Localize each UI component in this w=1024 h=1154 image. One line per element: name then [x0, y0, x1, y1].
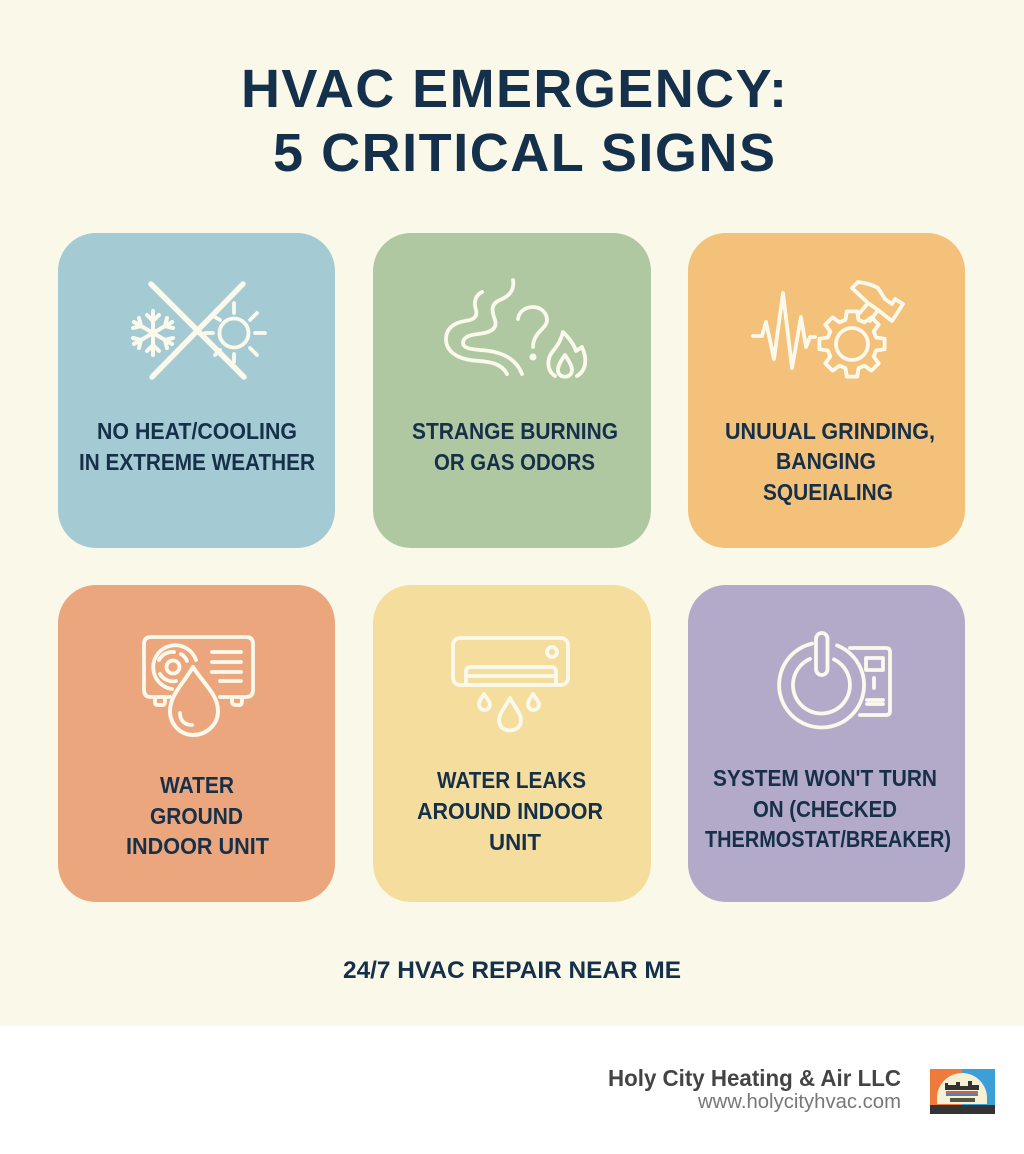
icon: sound wave and gear with hammer: [753, 282, 903, 377]
label: AROUND INDOOR: [417, 798, 603, 824]
title: [241, 59, 787, 183]
label: [417, 767, 603, 855]
icon: snowflake and sun crossed out: [133, 284, 265, 377]
label: [79, 418, 315, 475]
label: BANGING: [776, 448, 876, 474]
label: IN EXTREME WEATHER: [79, 449, 315, 475]
panel: water around unit: [58, 585, 335, 902]
label: WATER LEAKS: [437, 767, 586, 793]
title: HVAC EMERGENCY:: [241, 59, 787, 119]
panel: system will not turn on: [688, 585, 965, 902]
label: UNUUAL GRINDING,: [725, 418, 935, 444]
call to action: 24/7 HVAC REPAIR NEAR ME: [343, 957, 681, 984]
label: [705, 765, 951, 852]
label: INDOOR UNIT: [126, 833, 269, 859]
panel: no heat or cooling: [58, 233, 335, 548]
label: WATER: [160, 772, 234, 798]
label: UNIT: [489, 829, 541, 855]
label: GROUND: [150, 803, 243, 829]
label: [725, 418, 935, 505]
panel: strange odors: [373, 233, 651, 548]
label: [412, 418, 618, 475]
title: 5 CRITICAL SIGNS: [273, 123, 775, 183]
footer band: [0, 1026, 1024, 1154]
logo: [930, 1069, 995, 1114]
company name: Holy City Heating & Air LLC: [608, 1065, 901, 1091]
label: NO HEAT/COOLING: [97, 418, 297, 444]
icon: wall unit with drips: [453, 638, 568, 730]
icon: outdoor unit with water drop: [144, 637, 253, 735]
label: SQUEIALING: [763, 479, 893, 505]
panel: unusual noises: [688, 233, 965, 548]
label: SYSTEM WON'T TURN: [713, 765, 937, 791]
label: ON (CHECKED: [753, 796, 897, 822]
panel: water leaks: [373, 585, 651, 902]
label: OR GAS ODORS: [434, 449, 595, 475]
label: THERMOSTAT/BREAKER): [705, 826, 951, 852]
website: www.holycityhvac.com: [697, 1091, 901, 1113]
label: [126, 772, 269, 859]
icon: power symbol and thermostat: [779, 633, 890, 728]
label: STRANGE BURNING: [412, 418, 618, 444]
icon: smoke, question mark and flame: [446, 280, 585, 377]
